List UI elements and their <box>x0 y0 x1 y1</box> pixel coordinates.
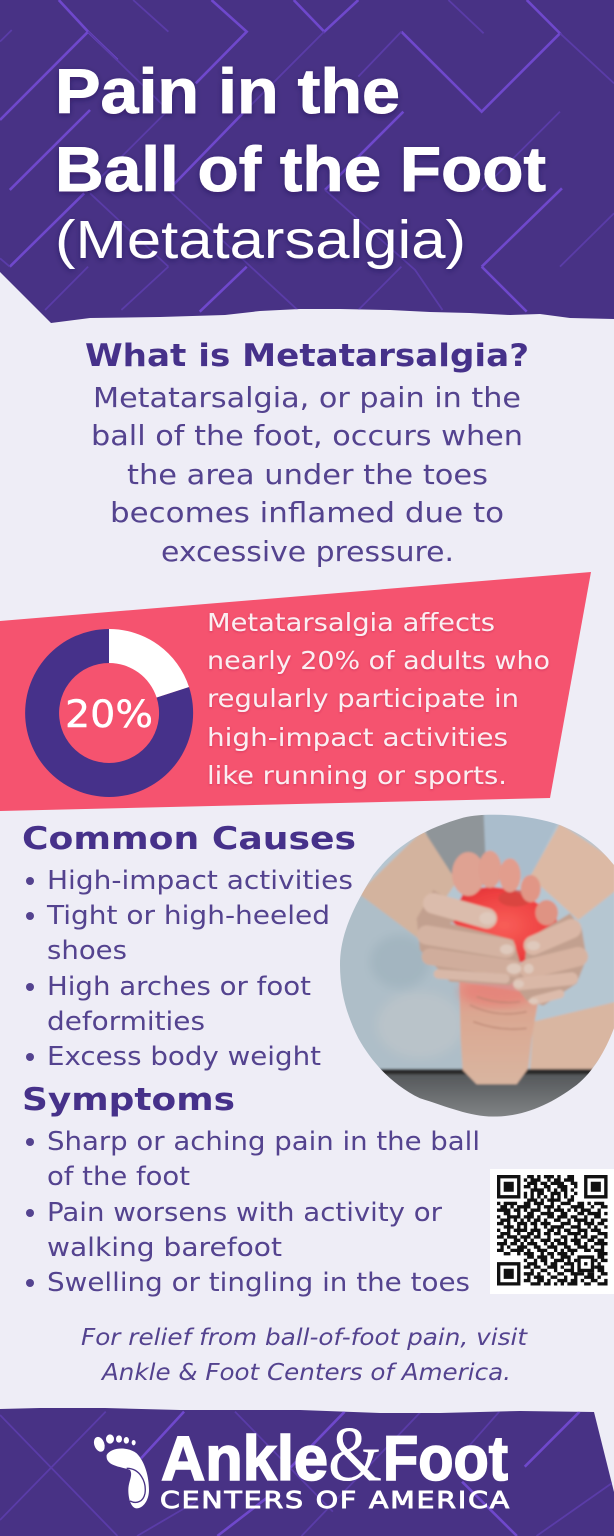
definition text: the area under the toes <box>127 458 488 491</box>
title: Ball of the Foot <box>55 135 546 205</box>
donut chart 20% <box>25 629 193 797</box>
definition text: becomes inflamed due to <box>110 496 504 529</box>
header purple shape <box>0 0 614 323</box>
symptoms bullet list: Pain worsens with activity or <box>47 1198 443 1228</box>
call to action text <box>81 1325 528 1386</box>
symptoms bullet list: Swelling or tingling in the toes <box>47 1268 470 1298</box>
title <box>55 57 546 270</box>
definition text: excessive pressure. <box>161 535 454 568</box>
logo wordmark: Ankle: Ankle <box>161 1424 328 1494</box>
symptoms bullet list: of the foot <box>47 1162 190 1192</box>
pink band <box>0 572 591 811</box>
logo ampersand: & <box>328 1410 382 1497</box>
symptoms bullet list: Sharp or aching pain in the ball <box>47 1127 480 1157</box>
heading: common causes: Common Causes <box>22 821 356 857</box>
donut label: 20% <box>65 693 153 736</box>
logo: Ankle and Foot Centers of America <box>92 1410 511 1514</box>
photo: hands holding foot with red pain spot <box>330 805 614 1125</box>
footer line pattern <box>0 1412 614 1536</box>
header line pattern <box>0 0 614 312</box>
definition text: Metatarsalgia, or pain in the <box>93 381 521 414</box>
causes bullet list: deformities <box>47 1007 205 1037</box>
causes bullet list: Excess body weight <box>47 1042 321 1072</box>
statistic text <box>207 608 550 790</box>
definition text: ball of the foot, occurs when <box>91 419 523 452</box>
causes bullet list: High-impact activities <box>47 866 353 896</box>
icon: footprint <box>92 1434 149 1508</box>
call to action text: For relief from ball-of-foot pain, visit <box>81 1325 528 1351</box>
QR code <box>490 1169 614 1294</box>
title: Pain in the <box>55 57 400 127</box>
section: symptoms <box>22 1082 480 1298</box>
heading: what is metatarsalgia: What is Metatarsalgia? <box>85 338 529 374</box>
section: common causes <box>22 821 356 1072</box>
symptoms bullet list: walking barefoot <box>47 1233 282 1263</box>
causes bullet list: shoes <box>47 936 127 966</box>
logo wordmark: Foot: Foot <box>383 1424 508 1494</box>
panel: 20% statistic <box>0 572 591 811</box>
statistic text: high-impact activities <box>207 723 508 752</box>
footer banner <box>0 1408 614 1536</box>
statistic text: Metatarsalgia affects <box>207 608 495 637</box>
section: what is metatarsalgia <box>85 338 529 568</box>
causes bullet list: Tight or high-heeled <box>46 901 330 931</box>
footer purple shape <box>0 1408 614 1536</box>
heading: symptoms: Symptoms <box>22 1082 235 1118</box>
symptoms bullet list <box>26 1127 480 1298</box>
call to action text: Ankle & Foot Centers of America. <box>100 1360 511 1386</box>
header banner <box>0 0 614 323</box>
statistic text: regularly participate in <box>207 684 519 713</box>
logo tagline: CENTERS OF AMERICA <box>160 1488 511 1514</box>
causes bullet list <box>26 866 353 1072</box>
statistic text: nearly 20% of adults who <box>207 646 550 675</box>
foot and hand detail <box>417 851 587 1006</box>
statistic text: like running or sports. <box>207 761 507 790</box>
causes bullet list: High arches or foot <box>47 972 311 1002</box>
title: (Metatarsalgia) <box>55 210 466 270</box>
definition text <box>91 381 523 568</box>
